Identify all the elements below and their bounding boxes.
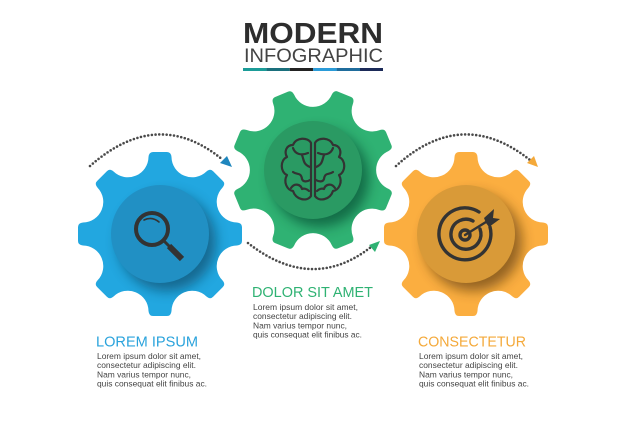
icon: magnifying glass	[136, 213, 182, 259]
arrow: green to orange	[248, 241, 380, 269]
green hub	[264, 121, 362, 219]
text block: lorem ipsum	[96, 334, 207, 388]
text block: consectetur: Lorem ipsum dolor sit amet,	[419, 351, 523, 361]
title line: INFOGRAPHIC: INFOGRAPHIC	[244, 45, 383, 67]
orange gear shadow	[424, 193, 522, 291]
arrow: blue to green	[90, 134, 232, 167]
text block: consectetur: CONSECTETUR	[418, 334, 526, 350]
orange hub	[417, 185, 515, 283]
text block: dolor sit amet: quis consequat elit finibus ac.	[253, 330, 362, 340]
text block: lorem ipsum: LOREM IPSUM	[96, 334, 198, 350]
orange gear	[384, 152, 548, 316]
icon: target with arrow	[439, 208, 500, 260]
text block: consectetur: consectetur adipiscing elit.	[419, 360, 518, 370]
icon: brain	[282, 139, 344, 199]
text block: lorem ipsum: Lorem ipsum dolor sit amet,	[97, 351, 201, 361]
title line: MODERN: MODERN	[243, 18, 383, 50]
text block: dolor sit amet: Lorem ipsum dolor sit amet,	[253, 302, 358, 312]
text block: consectetur: Nam varius tempor nunc,	[419, 370, 513, 380]
text block: lorem ipsum: quis consequat elit finibus ac.	[97, 378, 207, 388]
text block: lorem ipsum: Nam varius tempor nunc,	[97, 370, 191, 380]
text block: consectetur	[418, 334, 529, 388]
green gear shadow	[271, 129, 369, 227]
green gear	[234, 91, 392, 249]
text block: dolor sit amet: Nam varius tempor nunc,	[253, 320, 347, 330]
text block: dolor sit amet	[252, 285, 373, 340]
text block: consectetur: quis consequat elit finibus ac.	[419, 378, 529, 388]
text block: dolor sit amet: consectetur adipiscing elit.	[253, 311, 352, 321]
blue gear	[78, 152, 242, 316]
text block: lorem ipsum: consectetur adipiscing elit.	[97, 360, 196, 370]
title colour bar	[243, 68, 383, 71]
text block: dolor sit amet: DOLOR SIT AMET	[252, 285, 373, 301]
arrow: orange onward	[396, 134, 538, 167]
title	[243, 18, 383, 71]
blue gear shadow	[118, 193, 216, 291]
infographic canvas	[78, 22, 548, 388]
blue hub	[111, 185, 209, 283]
